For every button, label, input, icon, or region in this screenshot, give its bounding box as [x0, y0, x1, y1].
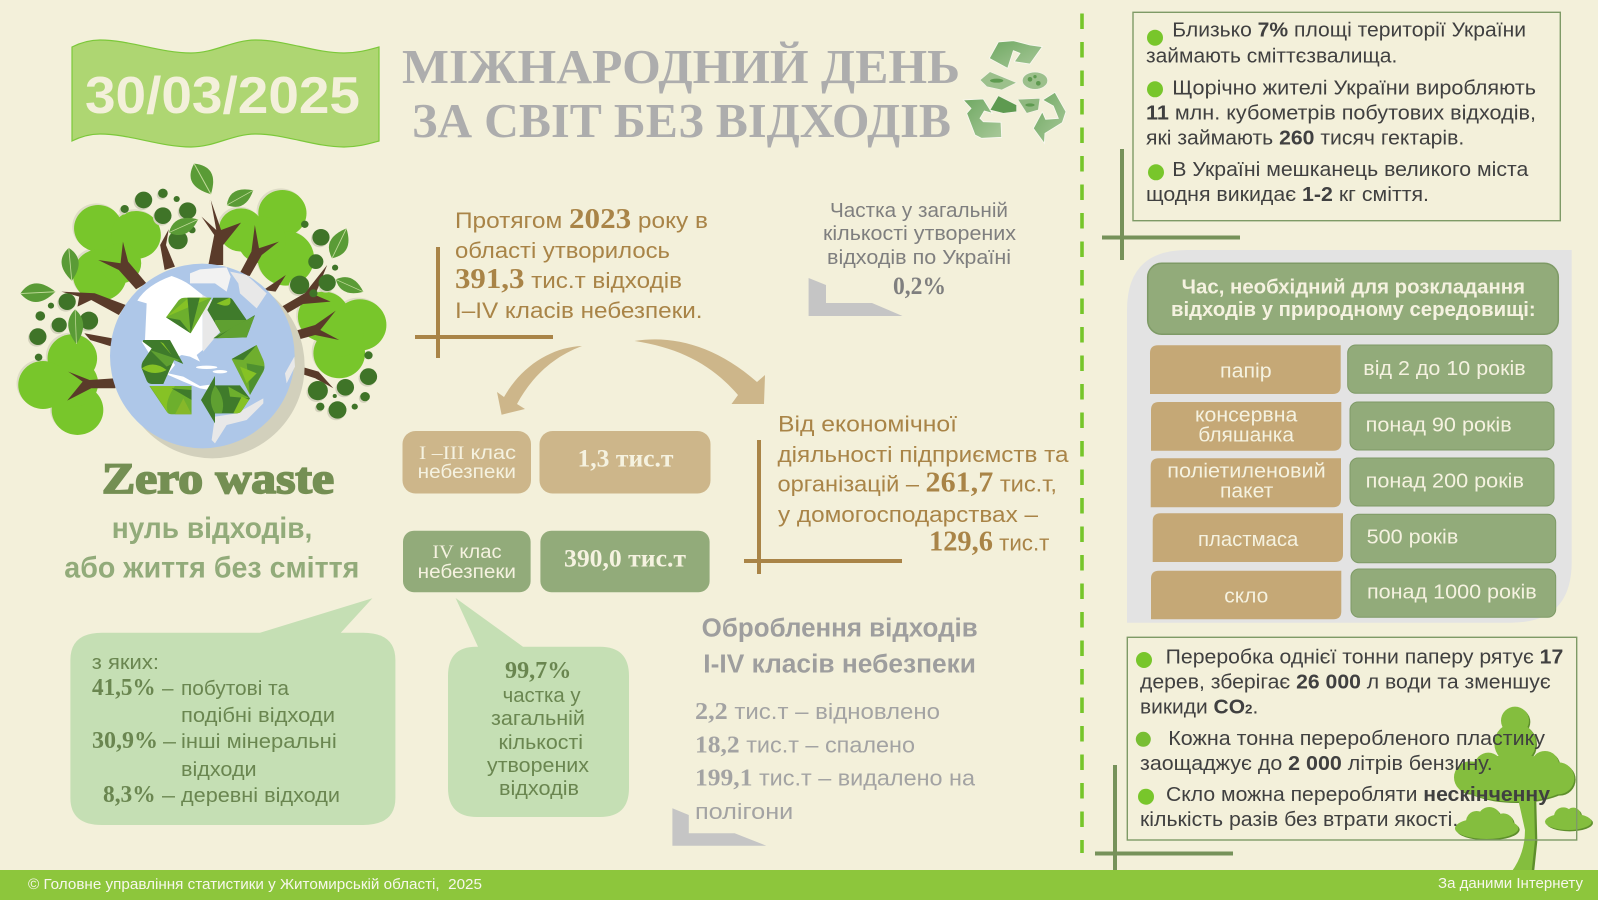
table row: glass: скло	[1224, 586, 1268, 608]
callout: waste breakdown: деревні відходи	[181, 785, 340, 807]
title: ЗА СВІТ БЕЗ ВІДХОДІВ	[412, 93, 951, 148]
callout: share 99.7%	[448, 598, 629, 817]
table row: paper: папір	[1220, 361, 1272, 383]
heading: Zero waste: нуль відходів,	[112, 512, 312, 545]
callout: share 99.7%: загальній	[491, 708, 585, 730]
table row: paper: від 2 до 10 років	[1363, 358, 1526, 380]
text block: total waste: I–IV класів небезпеки.	[455, 298, 702, 323]
class box: I-III label	[402, 431, 531, 494]
text block: share of Ukraine: 0,2%	[893, 273, 946, 300]
callout: waste breakdown: інші мінеральні	[181, 731, 337, 753]
class box: I-III value: 1,3 тис.т	[578, 446, 674, 473]
arrow: to classes	[497, 346, 582, 415]
panel: Ukraine facts: Близько 7% площі території України	[1172, 19, 1526, 42]
corner mark: top	[809, 278, 902, 316]
text block: share of Ukraine: кількості утворених	[823, 222, 1017, 245]
text block: share of Ukraine: Частка у загальній	[830, 199, 1008, 222]
section: waste processing: I-IV класів небезпеки	[703, 651, 976, 679]
table row: plastic bag: пакет	[1220, 481, 1273, 503]
date banner: 30/03/2025	[85, 67, 360, 125]
callout: waste breakdown: 30,9%	[92, 728, 158, 754]
section: waste processing: полігони	[695, 799, 793, 824]
title: МІЖНАРОДНИЙ ДЕНЬ	[402, 39, 960, 94]
icon: small recycle symbol	[963, 41, 1066, 143]
footer	[0, 870, 1598, 900]
dashed divider	[1080, 14, 1084, 853]
table row: can: понад 90 років	[1366, 415, 1512, 437]
callout: waste breakdown: з яких:	[92, 652, 159, 674]
panel: decomposition time background	[1127, 250, 1572, 623]
text block: total waste: області утворилось	[455, 238, 670, 263]
callout: share 99.7%: 99,7%	[505, 658, 571, 684]
text block: sources: організацій – 261,7 тис.т,	[778, 468, 1057, 499]
section: waste processing: 199,1 тис.т – видалено на	[695, 766, 976, 792]
date banner	[72, 40, 379, 147]
callout: waste breakdown	[70, 598, 395, 825]
table row: plastic bag: понад 200 років	[1366, 471, 1524, 493]
panel: recycling facts: кількість разів без втрати якості.	[1140, 808, 1458, 831]
corner mark: bottom	[672, 808, 766, 846]
class box: IV value: 390,0 тис.т	[564, 546, 686, 573]
callout: share 99.7%: відходів	[499, 778, 579, 800]
callout: waste breakdown: 8,3%	[103, 782, 156, 808]
text block: total waste: 391,3 тис.т відходів	[455, 264, 682, 295]
callout: share 99.7%: кількості	[498, 732, 583, 754]
text block: total waste: Протягом 2023 року в	[455, 204, 708, 235]
callout: waste breakdown: подібні відходи	[181, 705, 335, 727]
panel: Ukraine facts	[1133, 12, 1560, 221]
callout: waste breakdown: побутові та	[181, 678, 290, 700]
text block: sources: у домогосподарствах –	[778, 502, 1039, 527]
text block: sources: Від економічної	[778, 412, 957, 437]
callout: waste breakdown: 41,5%	[92, 675, 156, 701]
arrow: to sources	[635, 339, 765, 404]
panel: Ukraine facts: Щорічно жителі України виробляють	[1172, 76, 1536, 99]
panel: recycling facts: Кожна тонна переробленого пластику	[1168, 727, 1546, 750]
table row: paper	[1150, 345, 1552, 394]
panel: Ukraine facts: займають сміттєзвалища.	[1146, 44, 1397, 67]
section: waste processing	[695, 615, 978, 824]
class box: I-III label: I –III клас	[419, 443, 516, 464]
callout: share 99.7%: частка у	[503, 685, 581, 707]
cross line: green top	[1102, 149, 1240, 260]
table row: glass	[1151, 569, 1556, 619]
globe	[110, 264, 305, 458]
cross line: gold lower	[744, 440, 902, 574]
section: waste processing: Оброблення відходів	[702, 615, 978, 643]
section: waste processing: 18,2 тис.т – спалено	[695, 733, 915, 759]
heading: Zero waste: або життя без сміття	[64, 552, 359, 584]
callout: share 99.7%: утворених	[487, 755, 589, 777]
trees	[17, 159, 386, 435]
callout: waste breakdown: відходи	[181, 759, 257, 781]
class box: IV label: небезпеки	[418, 562, 516, 583]
footer: © Головне управління статистики у Житомирській області, 2025	[28, 877, 482, 893]
callout: waste breakdown: –	[163, 731, 177, 753]
class box: IV label: IV клас	[432, 542, 502, 563]
callout: waste breakdown: –	[162, 785, 176, 807]
class box: IV value	[540, 531, 710, 592]
cross line: green bottom	[1095, 765, 1233, 870]
class box: I-III value	[540, 431, 710, 494]
text block: share of Ukraine: відходів по Україні	[827, 246, 1011, 269]
illustration: green tree	[1454, 707, 1593, 873]
text block: share of Ukraine	[823, 199, 1017, 300]
table row: plastic	[1153, 513, 1556, 563]
cross line: gold top	[415, 247, 553, 358]
table row: can: консервна	[1195, 405, 1298, 427]
illustration: globe with trees	[17, 159, 386, 458]
title	[402, 39, 960, 148]
table row: plastic bag: поліетиленовий	[1167, 461, 1326, 483]
class box: IV label	[403, 531, 531, 592]
section: waste processing: 2,2 тис.т – відновлено	[695, 699, 940, 725]
panel: Ukraine facts: В Україні мешканець великого міста	[1172, 158, 1529, 181]
table row: plastic: 500 років	[1367, 526, 1458, 548]
panel: recycling facts	[1127, 637, 1577, 840]
panel: recycling facts: дерев, зберігає 26 000 л води та зменшує	[1140, 670, 1551, 693]
table heading	[1148, 263, 1558, 334]
panel: recycling facts: заощаджує до 2 000 літрів бензину.	[1140, 752, 1493, 775]
table row: can: бляшанка	[1198, 425, 1295, 447]
table row: plastic: пластмаса	[1198, 529, 1299, 551]
panel: recycling facts: Скло можна переробляти нескінченну	[1166, 783, 1551, 806]
heading: Zero waste: Zero waste	[102, 456, 334, 503]
table heading: Час, необхідний для розкладання	[1182, 276, 1525, 298]
table row: can	[1151, 402, 1554, 451]
panel: Ukraine facts: 11 млн. кубометрів побутових відходів,	[1146, 101, 1536, 124]
text block: total waste	[455, 204, 708, 323]
table row: glass: понад 1000 років	[1367, 582, 1537, 604]
class box: I-III label: небезпеки	[418, 462, 516, 483]
text block: sources	[778, 412, 1069, 558]
panel: Ukraine facts: щодня викидає 1-2 кг сміття.	[1146, 183, 1429, 206]
table heading: відходів у природному середовищі:	[1171, 299, 1536, 321]
heading: Zero waste	[64, 456, 359, 584]
table row: plastic bag	[1151, 458, 1554, 507]
panel: Ukraine facts: які займають 260 тисяч гектарів.	[1146, 126, 1464, 149]
panel: recycling facts: Переробка однієї тонни паперу рятує 17	[1166, 645, 1563, 668]
footer: За даними Інтернету	[1438, 876, 1584, 892]
panel: recycling facts: викиди CO2.	[1140, 695, 1258, 718]
text block: sources: діяльності підприємств та	[778, 442, 1069, 467]
text block: sources: 129,6 тис.т	[929, 527, 1049, 558]
callout: waste breakdown: –	[162, 678, 174, 700]
